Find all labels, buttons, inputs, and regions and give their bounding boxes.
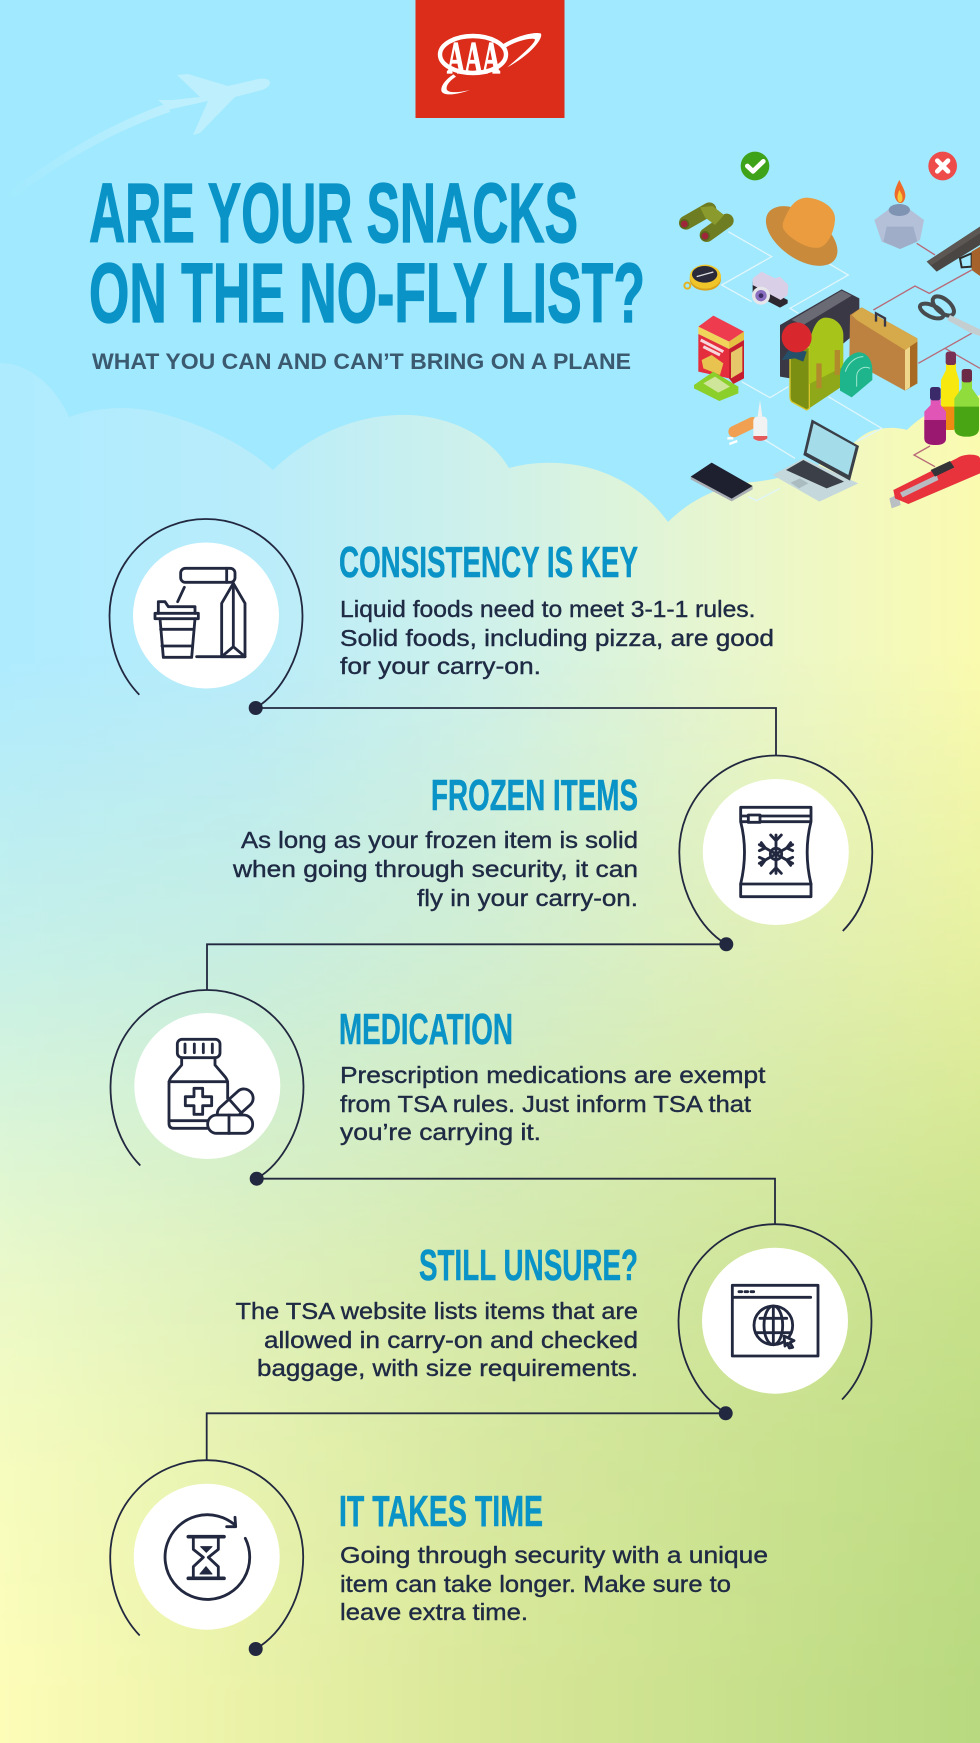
text block: you’re carrying it.	[340, 1119, 541, 1145]
text block	[232, 827, 638, 911]
icon: box cutter	[889, 455, 980, 508]
icon: brown briefcase	[849, 307, 917, 391]
icon: browser window with globe	[732, 1285, 818, 1356]
heading: STILL UNSURE?	[419, 1241, 638, 1290]
text block	[236, 1298, 638, 1381]
icon: scissors	[918, 293, 980, 336]
icon: medicine bottles	[727, 400, 767, 444]
icon: frozen bag	[741, 807, 811, 897]
icon: black suitcase	[780, 289, 859, 380]
panel: medication	[110, 990, 766, 1186]
illustration: travel items	[679, 152, 980, 508]
text block	[340, 1062, 766, 1145]
AAA logo: AAA	[447, 32, 500, 83]
icon: snack box	[694, 316, 744, 401]
icon: binoculars	[679, 206, 727, 241]
icon: bottles	[924, 352, 979, 445]
icon: teal bag	[840, 352, 872, 397]
title: ON THE NO-FLY LIST?	[89, 246, 645, 340]
icon: smartphone	[691, 463, 753, 501]
text block	[340, 1542, 768, 1625]
text block: leave extra time.	[340, 1599, 528, 1625]
icon: camera	[752, 272, 788, 308]
text block: The TSA website lists items that are	[236, 1298, 638, 1324]
icon: cup and paper bag	[155, 568, 245, 657]
AAA logo	[416, 0, 564, 118]
text block: As long as your frozen item is solid	[241, 827, 638, 853]
icon: hat	[755, 194, 848, 278]
panel: it takes time	[110, 1460, 768, 1656]
text block: from TSA rules. Just inform TSA that	[340, 1091, 752, 1117]
icon: handgun	[927, 227, 980, 276]
heading: CONSISTENCY IS KEY	[339, 538, 638, 587]
panel: frozen items	[232, 756, 872, 951]
title	[89, 166, 645, 340]
icon: green backpack	[782, 318, 843, 410]
icon: hourglass with circular arrow	[165, 1515, 250, 1599]
text block: Liquid foods need to meet 3-1-1 rules.	[340, 596, 756, 622]
text block: fly in your carry-on.	[417, 885, 638, 911]
icon: medicine bottle and pills	[169, 1039, 257, 1133]
connector lines between steps	[207, 708, 776, 1460]
icon: allowed check mark	[741, 152, 769, 180]
text block	[340, 596, 774, 679]
icon: laptop	[773, 419, 859, 502]
panel: still unsure	[236, 1224, 872, 1420]
text block: for your carry-on.	[340, 653, 541, 679]
icon: airplane with contrail	[0, 74, 270, 208]
icon: compass	[684, 265, 721, 291]
heading: MEDICATION	[339, 1005, 513, 1054]
text block: Prescription medications are exempt	[340, 1062, 766, 1088]
icon: prohibited cross	[928, 152, 957, 180]
text block: baggage, with size requirements.	[257, 1355, 638, 1381]
text block: allowed in carry-on and checked	[264, 1327, 638, 1353]
text block: item can take longer. Make sure to	[340, 1571, 731, 1597]
heading: IT TAKES TIME	[339, 1487, 543, 1536]
heading: FROZEN ITEMS	[431, 771, 638, 820]
text block: Solid foods, including pizza, are good	[340, 625, 774, 651]
title: ARE YOUR SNACKS	[89, 166, 578, 260]
text block: when going through security, it can	[232, 856, 638, 882]
panel: consistency is key	[110, 519, 774, 715]
text block: Going through security with a unique	[340, 1542, 768, 1568]
icon: camping lamp	[874, 180, 924, 249]
subtitle: WHAT YOU CAN AND CAN’T BRING ON A PLANE	[92, 349, 631, 374]
